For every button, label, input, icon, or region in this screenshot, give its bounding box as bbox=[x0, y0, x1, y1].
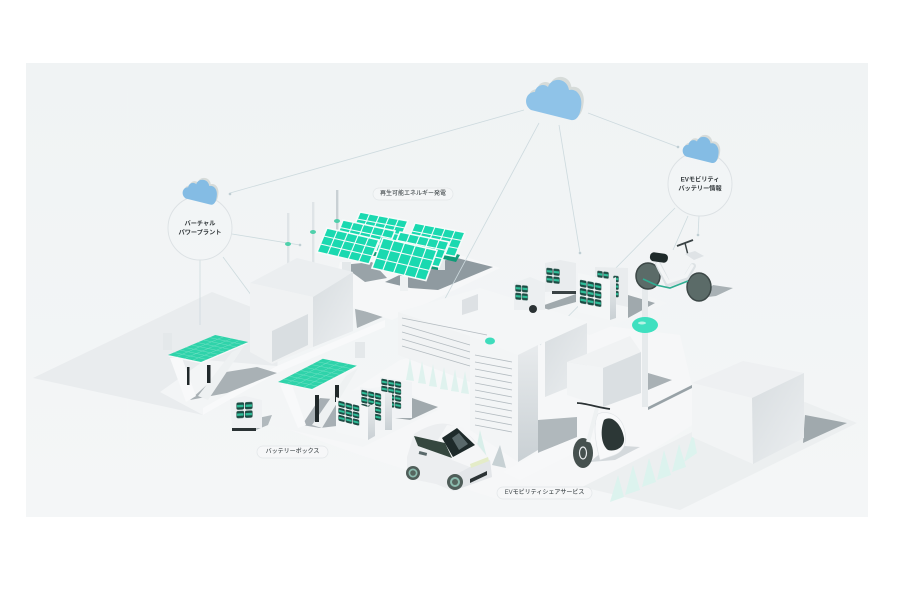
label: renewable energy generation: 再生可能エネルギー発電 bbox=[380, 189, 446, 197]
icon: left cloud bbox=[183, 178, 219, 205]
ground: central light road area bbox=[290, 320, 700, 500]
battery cart bbox=[230, 396, 272, 431]
platform: battery station site bbox=[270, 385, 438, 447]
callout circle: EV mobility battery info: EVモビリティ bbox=[681, 176, 719, 184]
building: right large box bbox=[692, 361, 804, 464]
trees under central block bbox=[406, 358, 506, 468]
callout circle: virtual power plant: パワープラント bbox=[179, 230, 221, 236]
callout circle: virtual power plant: バーチャル bbox=[185, 220, 215, 228]
fin trees on right site bbox=[610, 433, 697, 502]
building: central slatted block bbox=[398, 288, 600, 480]
EV car bbox=[406, 424, 492, 491]
platform: solar site bbox=[330, 255, 500, 320]
icon: right cloud bbox=[683, 135, 720, 163]
label: EV mobility share service bbox=[497, 487, 592, 499]
label: renewable energy generation bbox=[373, 188, 453, 200]
connection lines bbox=[200, 110, 699, 345]
charging canopy right bbox=[278, 342, 365, 428]
solar poles bbox=[285, 190, 340, 265]
building: small house bbox=[567, 336, 641, 407]
battery towers at station bbox=[336, 377, 412, 440]
lamp post bbox=[632, 273, 692, 410]
label: battery box: バッテリーボックス bbox=[266, 447, 319, 455]
background panel bbox=[26, 63, 868, 517]
callout circle: virtual power plant bbox=[168, 196, 232, 260]
building: left warehouse bbox=[250, 258, 353, 364]
platform: right battery site bbox=[510, 290, 667, 335]
EV scooter bbox=[573, 403, 640, 468]
EV bike bbox=[636, 240, 733, 301]
label: battery box bbox=[257, 446, 328, 458]
callout circle: EV mobility battery info: バッテリー情報 bbox=[678, 184, 722, 192]
right battery boxes bbox=[514, 260, 628, 320]
label: EV mobility share service: EVモビリティシェアサービス bbox=[505, 488, 584, 496]
platform: virtual power plant site bbox=[33, 292, 385, 415]
icon: main cloud bbox=[526, 77, 584, 120]
solar panel array bbox=[317, 212, 465, 291]
platform: right large box site bbox=[582, 402, 857, 510]
charging canopy left bbox=[163, 333, 277, 402]
callout circle: EV mobility battery info bbox=[668, 152, 732, 216]
